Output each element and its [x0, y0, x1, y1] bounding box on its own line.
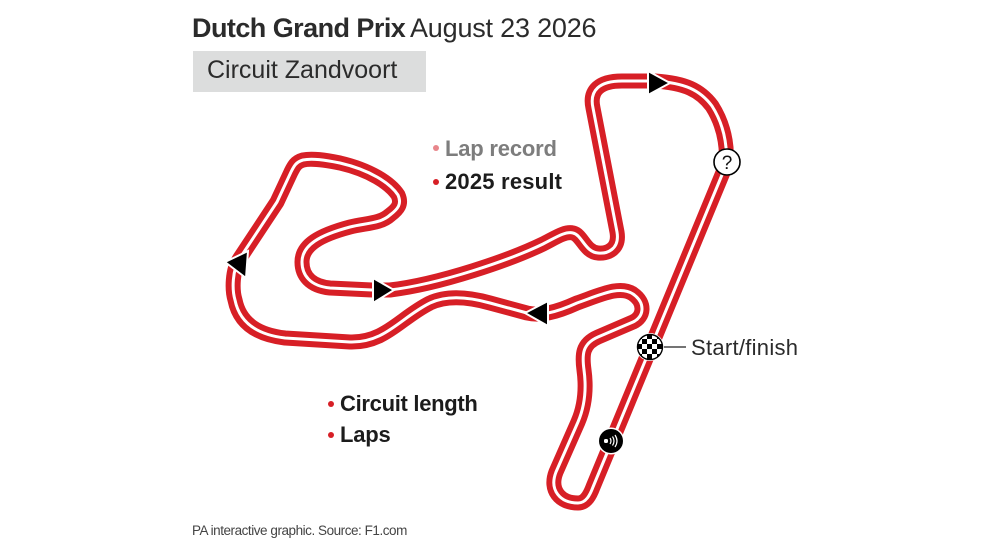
title: [192, 13, 596, 43]
circuit name label: [193, 51, 426, 92]
legend: lap record: Lap record: [445, 136, 557, 161]
legend: 2025 result: 2025 result: [445, 169, 563, 194]
legend: circuit length: Circuit length: [340, 391, 478, 416]
arrow: inner loop direction: [373, 278, 394, 303]
icon: question mark marker: [714, 149, 740, 175]
arrow: left side direction: [225, 251, 248, 278]
circuit name label: Circuit Zandvoort: [207, 56, 397, 84]
title: Dutch Grand Prix: [192, 13, 406, 43]
title: August 23 2026: [410, 13, 596, 43]
icon: chequered start/finish flag: [636, 333, 664, 361]
arrow: middle section direction: [525, 301, 548, 326]
icon: DRS signal marker: [598, 428, 624, 454]
circuit track: [233, 81, 726, 503]
source note: PA interactive graphic. Source: F1.com: [192, 523, 407, 538]
icon: question mark marker: ?: [722, 153, 732, 174]
legend: laps: Laps: [340, 422, 391, 447]
arrow: top straight direction: [648, 71, 670, 95]
start/finish label: Start/finish: [691, 335, 798, 360]
